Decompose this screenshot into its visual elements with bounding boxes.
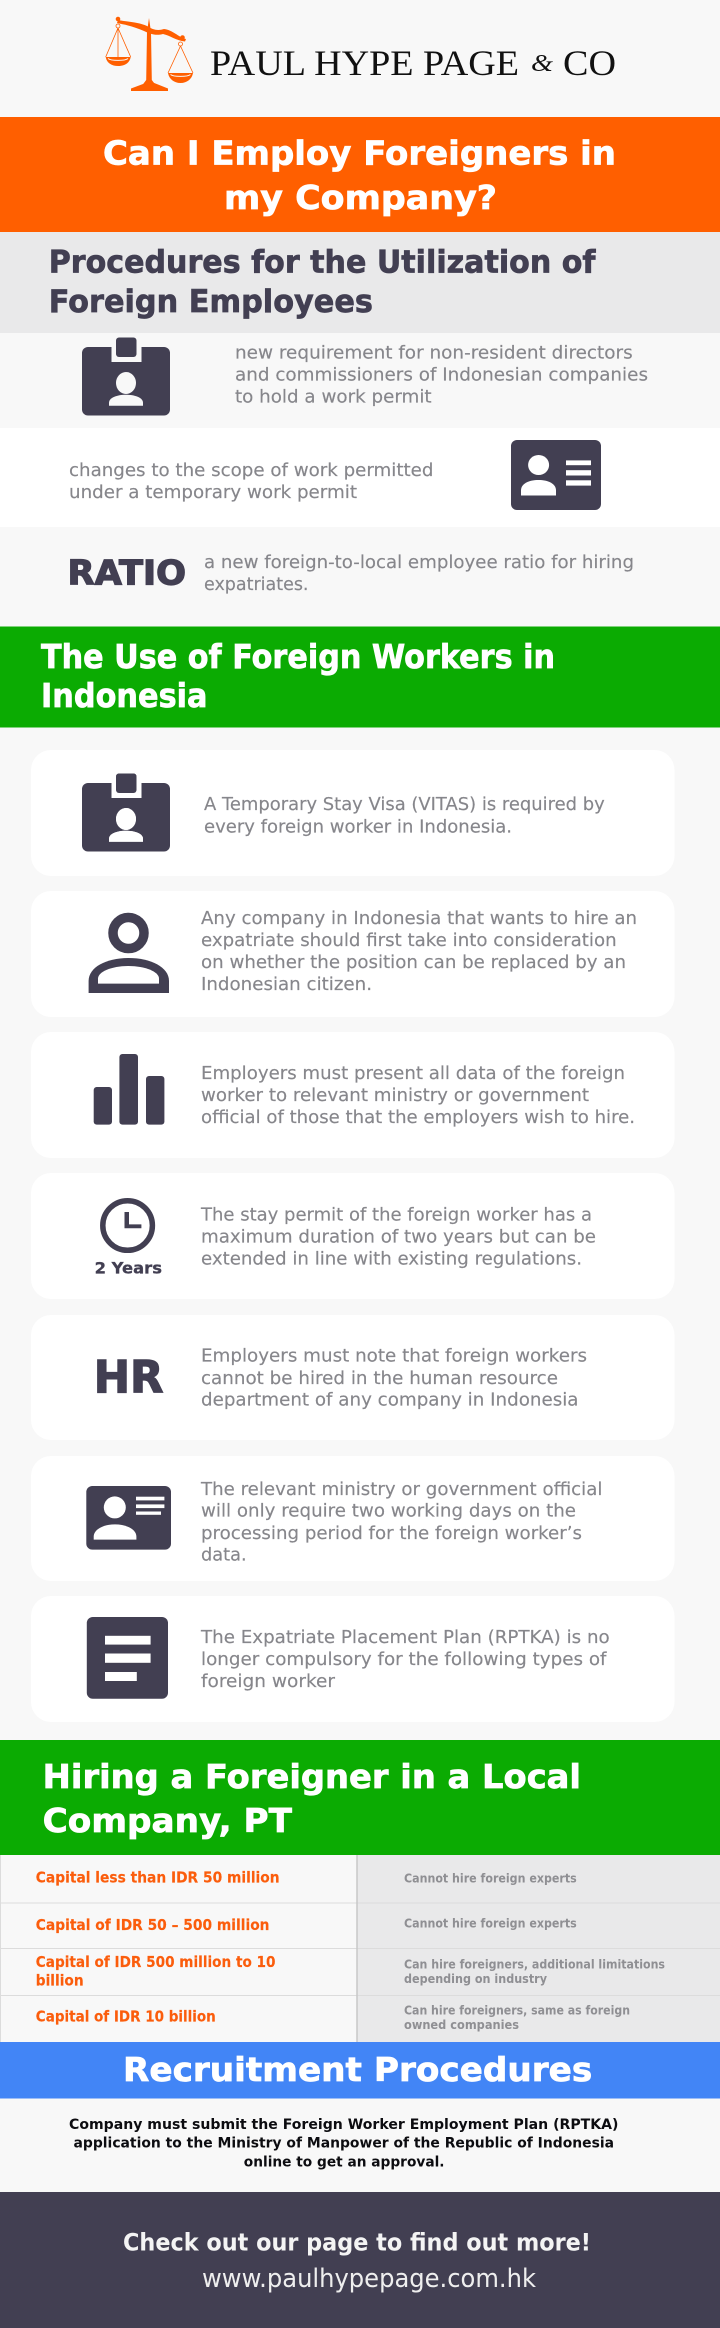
icon: orange scales of justice: [106, 17, 193, 91]
title banner: my Company?: [224, 178, 497, 217]
card: processing period: [31, 1456, 674, 1581]
icon: bar chart: [94, 1054, 164, 1125]
icon: id badge: [82, 338, 170, 416]
header: logo and firm name: [106, 17, 616, 91]
text: work permit requirement: new requirement for non-resident directors: [235, 343, 633, 363]
title banner: Can I Employ Foreigners in: [103, 134, 616, 172]
heading: recruitment procedures: Recruitment Procedures: [123, 2050, 592, 2089]
table: capital and hiring rules: [0, 1855, 720, 2042]
text: [200, 1206, 596, 1270]
table left column: capital: Capital of IDR 10 billion: [36, 2007, 216, 2025]
text: foreign worker: [201, 1672, 336, 1692]
text: recruitment procedure description: online to get an approval.: [244, 2154, 444, 2170]
firm name: PAUL HYPE PAGE: [210, 43, 519, 83]
text: The Expatriate Placement Plan (RPTKA) is no: [200, 1628, 610, 1648]
text: scope of work: [69, 461, 433, 503]
text: on whether the position can be replaced by an: [201, 953, 626, 973]
panel: procedures heading: Procedures for the Utilization of: [49, 245, 596, 281]
icon: HR wordmark: HR: [94, 1352, 164, 1403]
text: official of those that the employers wish to hire.: [201, 1108, 635, 1128]
text: maximum duration of two years but can be: [201, 1228, 596, 1248]
title banner: [0, 117, 720, 232]
text: data.: [201, 1546, 247, 1566]
text: The relevant ministry or government official: [200, 1480, 602, 1500]
table right column: rules: [404, 1872, 665, 2032]
table left column: capital: Capital of IDR 50 – 500 million: [36, 1916, 269, 1934]
panel: procedure row 3: [0, 527, 720, 627]
text: scope of work: under a temporary work permit: [69, 483, 357, 503]
text: employee ratio: expatriates.: [204, 575, 308, 595]
heading: recruitment procedures: [0, 2042, 720, 2098]
text: The stay permit of the foreign worker has a: [200, 1206, 592, 1226]
panel: procedures heading: [0, 232, 720, 333]
icon: id badge: [82, 774, 170, 852]
table left column: capital: billion: [36, 1972, 84, 1990]
icon: clock with 2 years label: [95, 1201, 162, 1278]
icon: person outline: [89, 918, 169, 993]
text: worker to relevant ministry or government: [201, 1086, 589, 1106]
footer: call to action: www.paulhypepage.com.hk: [202, 2264, 536, 2294]
text: employee ratio: [204, 553, 634, 595]
text: processing period for the foreign worker’s: [201, 1524, 582, 1544]
firm name: &: [531, 51, 553, 77]
text: scope of work: changes to the scope of work permitted: [69, 461, 433, 481]
footer: call to action: [0, 2192, 720, 2328]
text: longer compulsory for the following types of: [201, 1650, 607, 1670]
table left column: capital: Capital less than IDR 50 million: [36, 1869, 280, 1887]
panel: procedure row 1: [0, 333, 720, 428]
heading: use of foreign workers: [0, 626, 720, 728]
card: stay permit duration: [31, 1173, 674, 1299]
table right column: rules: Cannot hire foreign experts: [404, 1872, 577, 1886]
text: work permit requirement: to hold a work permit: [235, 387, 432, 407]
panel: procedures heading: Foreign Employees: [49, 284, 373, 320]
text: [201, 1064, 635, 1128]
text: recruitment procedure description: application to the Ministry of Manpower of the Republic of Indonesia: [74, 2136, 614, 2152]
text: [200, 1480, 602, 1566]
icon: id card: [86, 1486, 171, 1550]
table right column: rules: owned companies: [404, 2018, 519, 2032]
text: work permit requirement: and commissioners of Indonesian companies: [235, 365, 648, 385]
card: temporary stay visa: [31, 750, 674, 876]
text: Indonesian citizen.: [201, 975, 372, 995]
text: Any company in Indonesia that wants to hire an: [201, 909, 637, 929]
icon: document lines: [87, 1617, 168, 1699]
icon: id card: [511, 440, 601, 510]
table right column: rules: depending on industry: [404, 1972, 547, 1986]
firm name: CO: [563, 43, 616, 83]
panel: procedure row 2: [0, 428, 720, 527]
table right column: rules: Can hire foreigners, same as foreign: [404, 2004, 630, 2018]
text: every foreign worker in Indonesia.: [204, 818, 512, 838]
text: expatriate should first take into consideration: [201, 931, 617, 951]
card: human resources restriction: [31, 1315, 674, 1440]
icon: clock with 2 years label: 2 Years: [95, 1259, 162, 1278]
card: RPTKA no longer compulsory: [31, 1596, 674, 1722]
text: recruitment procedure description: Company must submit the Foreign Worker Employment Plan (RPTKA): [69, 2117, 618, 2133]
heading: use of foreign workers: Indonesia: [41, 676, 208, 715]
text: [201, 909, 637, 995]
text: Employers must present all data of the foreign: [201, 1064, 625, 1084]
table left column: capital: Capital of IDR 500 million to 10: [36, 1953, 275, 1971]
text: [200, 1628, 610, 1692]
text: extended in line with existing regulations.: [201, 1250, 582, 1270]
footer: call to action: Check out our page to find out more!: [123, 2229, 591, 2257]
table right column: rules: Can hire foreigners, additional limitations: [404, 1957, 665, 1971]
card: replace by Indonesian citizen: [31, 891, 674, 1017]
heading: hiring a foreigner: Hiring a Foreigner in a Local: [43, 1757, 581, 1796]
text: A Temporary Stay Visa (VITAS) is required by: [204, 795, 605, 815]
heading: use of foreign workers: The Use of Foreign Workers in: [41, 637, 555, 676]
table right column: rules: Cannot hire foreign experts: [404, 1917, 577, 1931]
text: cannot be hired in the human resource: [201, 1369, 558, 1389]
table left column: capital: [36, 1869, 280, 2025]
card: present data: [31, 1032, 674, 1158]
icon: RATIO wordmark: RATIO: [68, 554, 186, 592]
text: department of any company in Indonesia: [201, 1391, 578, 1411]
heading: hiring a foreigner: [0, 1740, 720, 1855]
text: Employers must note that foreign workers: [201, 1347, 587, 1367]
heading: hiring a foreigner: Company, PT: [43, 1801, 292, 1840]
text: will only require two working days on the: [201, 1502, 576, 1522]
text: work permit requirement: [235, 343, 648, 407]
text: [201, 1347, 587, 1411]
text: [204, 795, 605, 838]
text: employee ratio: a new foreign-to-local employee ratio for hiring: [204, 553, 634, 573]
text: recruitment procedure description: [69, 2117, 618, 2170]
